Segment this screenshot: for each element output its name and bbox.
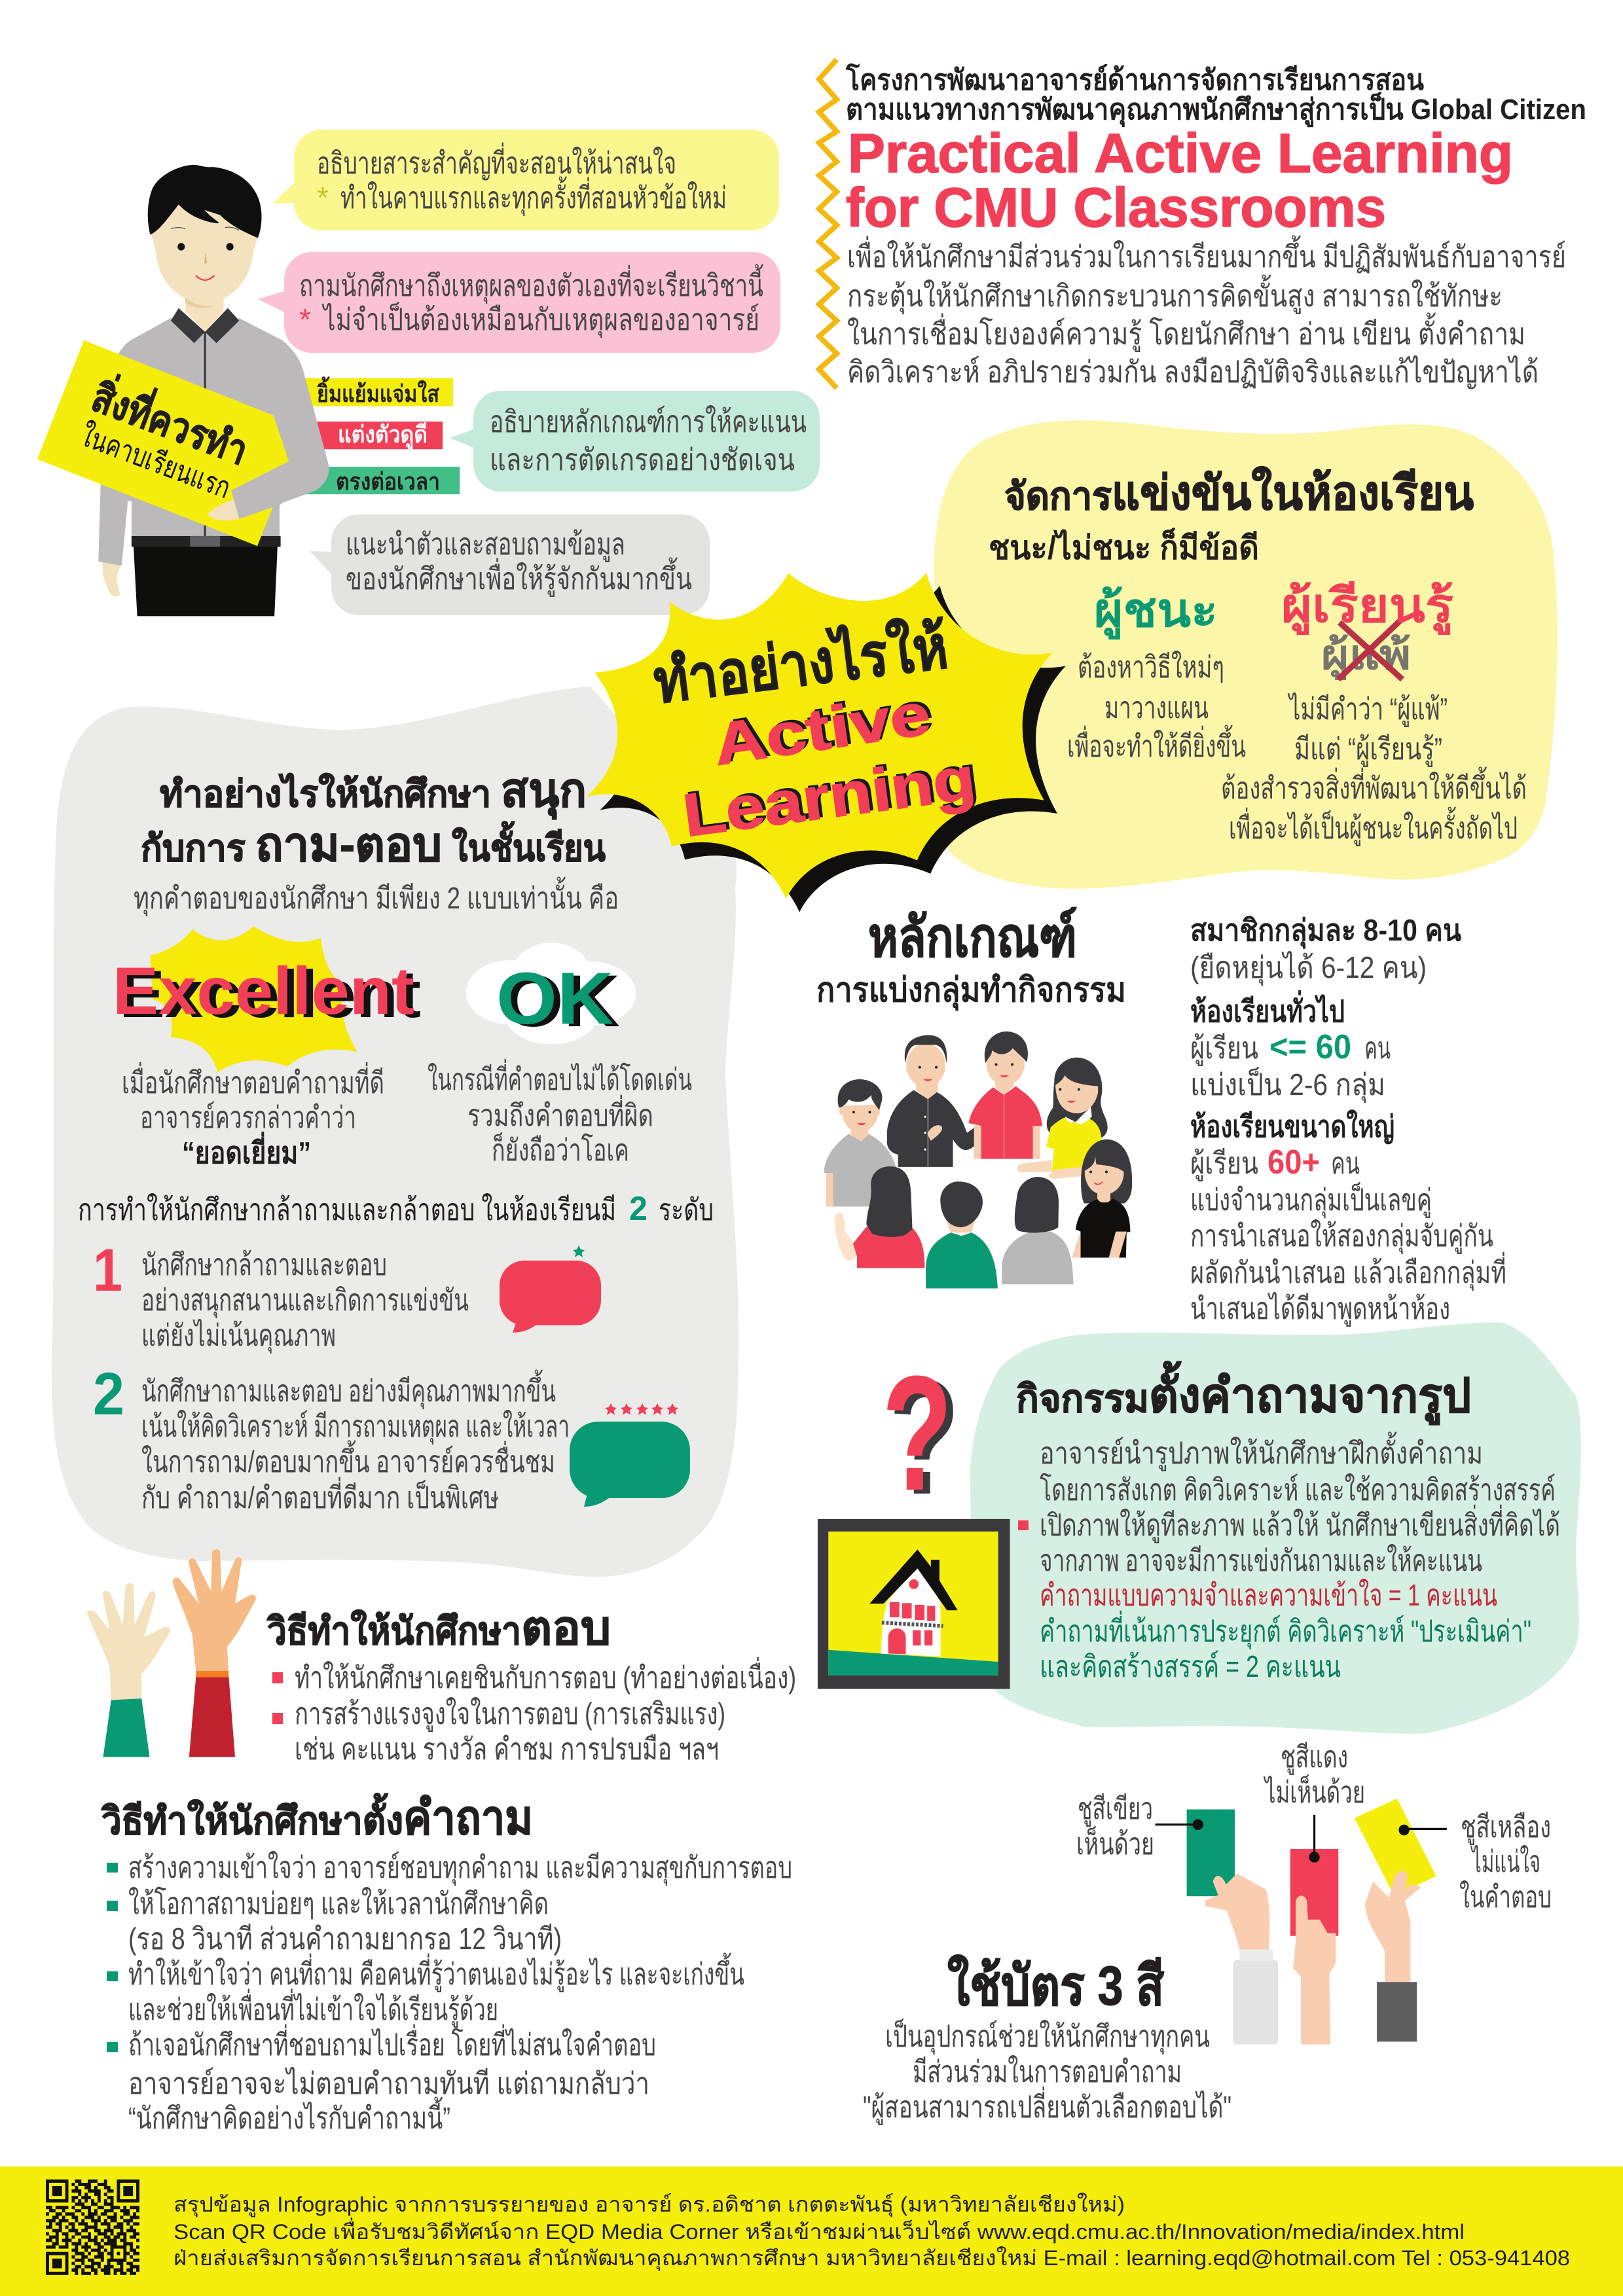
icon: red speech bubble with star xyxy=(500,1246,601,1333)
text: group size rules: <= 60 xyxy=(1269,1028,1351,1066)
levels heading: 2 xyxy=(629,1190,647,1228)
ok text xyxy=(428,1058,692,1167)
list: อาจารย์อาจจะไม่ตอบคำถามทันที แต่ถามกลับว่า xyxy=(128,2066,649,2100)
icon: green speech bubble with five stars xyxy=(570,1403,690,1507)
label: yellow card xyxy=(1459,1810,1552,1914)
callout: green speech bubble: และการตัดเกรดอย่างชัดเจน xyxy=(490,442,795,476)
level two: เน้นให้คิดวิเคราะห์ มีการถามเหตุผล และให้เวลา xyxy=(141,1409,570,1445)
callout: pink speech bubble: * xyxy=(299,302,311,336)
list: และช่วยให้เพื่อนที่ไม่เข้าใจได้เรียนรู้ด้วย xyxy=(128,1988,498,2028)
heading xyxy=(101,1792,533,1844)
ok text: ในกรณีที่คำตอบไม่ได้โดดเด่น xyxy=(428,1058,692,1096)
qr code xyxy=(46,2181,139,2273)
heading xyxy=(266,1602,611,1655)
list: เช่น คะแนน รางวัล คำชม การปรบมือ ฯลฯ xyxy=(295,1732,719,1766)
callout: yellow speech bubble: * xyxy=(317,181,329,215)
text: card explanation: เป็นอุปกรณ์ช่วยให้นักศึกษาทุกคน xyxy=(885,2018,1210,2055)
heading line two: ถาม-ตอบ xyxy=(255,819,442,871)
excellent text: เมื่อนักศึกษาตอบคำถามที่ดี xyxy=(122,1062,384,1100)
heading line two xyxy=(141,819,606,871)
loser crossed out: ผู้แพ้ xyxy=(1321,633,1411,680)
subheading: ทุกคำตอบของนักศึกษา มีเพียง 2 แบบเท่านั้น คือ xyxy=(134,876,619,917)
section: group criteria heading: หลักเกณฑ์ xyxy=(868,906,1077,968)
level one: นักศึกษากล้าถามและตอบ xyxy=(141,1247,387,1282)
heading line one xyxy=(160,764,587,820)
level two: กับ คำถาม/คำตอบที่ดีมาก เป็นพิเศษ xyxy=(141,1477,499,1515)
level two: 2 xyxy=(93,1361,124,1427)
activity text: และคิดสร้างสรรค์ = 2 คะแนน xyxy=(1040,1649,1341,1683)
loser crossed out xyxy=(1321,620,1411,680)
burst badge: how to do active learning xyxy=(587,573,1066,912)
subheading: ชนะ/ไม่ชนะ ก็มีข้อดี xyxy=(989,528,1259,566)
text: group size rules: นำเสนอได้ดีมาพูดหน้าห้อง xyxy=(1190,1291,1450,1327)
intro paragraph: ในการเชื่อมโยงองค์ความรู้ โดยนักศึกษา อ่าน เขียน ตั้งคำถาม xyxy=(847,312,1525,352)
panel: question and answer xyxy=(52,687,739,1577)
text: group size rules xyxy=(1190,913,1506,1327)
text: group size rules: ห้องเรียนขนาดใหญ่ xyxy=(1190,1109,1395,1144)
panel: classroom competition xyxy=(934,420,1558,889)
label: yellow card: ไม่แน่ใจ xyxy=(1470,1844,1541,1878)
text: group size rules: การนำเสนอให้สองกลุ่มจับคู่กัน xyxy=(1190,1219,1493,1255)
label: red card: ชูสีแดง xyxy=(1281,1740,1348,1775)
list: ถ้าเจอนักศึกษาที่ชอบถามไปเรื่อย โดยที่ไม่สนใจคำตอบ xyxy=(128,2024,656,2062)
activity text xyxy=(1040,1431,1560,1683)
winner text: เพื่อจะทำให้ดียิ่งขึ้น xyxy=(1067,725,1246,763)
callout: gray speech bubble: ของนักศึกษาเพื่อให้รู้จักกันมากขึ้น xyxy=(346,557,692,597)
learner text xyxy=(1221,692,1527,846)
bullet xyxy=(1018,1520,1029,1530)
ok text: ก็ยังถือว่าโอเค xyxy=(492,1132,629,1167)
tag: on time: ตรงต่อเวลา xyxy=(336,468,440,495)
ok text: รวมถึงคำตอบที่ผิด xyxy=(467,1094,653,1132)
text: group size rules: 60+ xyxy=(1267,1143,1320,1181)
credits text: ฝ่ายส่งเสริมการจัดการเรียนการสอน สำนักพัฒนาคุณภาพการศึกษา มหาวิทยาลัยเชียงใหม่ E-mail : learning.eqd@hotmail.com Tel : 053-941408 xyxy=(173,2246,1570,2271)
levels heading: ระดับ xyxy=(659,1193,714,1227)
callout: green speech bubble: อธิบายหลักเกณฑ์การให้คะแนน xyxy=(490,404,807,439)
main title: Practical Active Learning xyxy=(848,122,1513,184)
heading line one: ทำอย่างไรให้นักศึกษา xyxy=(160,772,491,814)
text: group size rules: สมาชิกกลุ่มละ 8-10 คน xyxy=(1190,913,1461,949)
winner text: ต้องหาวิธีใหม่ๆ xyxy=(1078,650,1224,684)
level one: แต่ยังไม่เน้นคุณภาพ xyxy=(141,1318,336,1354)
text: card explanation: "ผู้สอนสามารถเปลี่ยนตัวเลือกตอบได้" xyxy=(863,2086,1231,2125)
section: group criteria heading: การแบ่งกลุ่มทำกิจกรรม xyxy=(816,971,1126,1011)
icon: raised hands xyxy=(87,1549,256,1757)
level one: อย่างสนุกสนานและเกิดการแข่งขัน xyxy=(141,1283,469,1319)
header block xyxy=(819,60,1586,389)
callout: gray speech bubble xyxy=(310,514,710,615)
level one: 1 xyxy=(93,1237,122,1304)
callout: gray speech bubble: แนะนำตัวและสอบถามข้อมูล xyxy=(346,527,625,562)
learner text: ต้องสำรวจสิ่งที่พัฒนาให้ดีขึ้นได้ xyxy=(1221,766,1527,805)
label: green card: เห็นด้วย xyxy=(1076,1826,1154,1861)
label: green card: ชูสีเขียว xyxy=(1078,1791,1153,1827)
heading xyxy=(1016,1361,1471,1426)
heading: วิธีทำให้นักศึกษาตั้ง xyxy=(101,1793,403,1842)
panel: picture question activity xyxy=(970,1323,1581,1734)
callout: pink speech bubble: ไม่จำเป็นต้องเหมือนกับเหตุผลของอาจารย์ xyxy=(321,302,759,338)
burst word: learning: Learning xyxy=(679,745,979,850)
text: group size rules: (ยืดหยุ่นได้ 6-12 คน) xyxy=(1190,950,1427,986)
learner text: มีแต่ “ผู้เรียนรู้” xyxy=(1294,732,1442,767)
label: yellow card: ชูสีเหลือง xyxy=(1461,1810,1551,1845)
excellent badge: Excellent xyxy=(113,954,414,1028)
heading: คำถาม xyxy=(403,1792,533,1844)
section: group criteria heading xyxy=(816,906,1126,1011)
callout: yellow speech bubble: อธิบายสาระสำคัญที่จะสอนให้น่าสนใจ xyxy=(317,142,676,180)
bullets xyxy=(272,1672,283,1724)
credits text: สรุปข้อมูล Infographic จากการบรรยายของ อาจารย์ ดร.อดิชาต เกตตะพันธุ์ (มหาวิทยาลัยเชียงใหม่) xyxy=(173,2193,1125,2217)
text: group size rules: ผู้เรียน xyxy=(1190,1146,1258,1181)
callout: green speech bubble xyxy=(450,391,820,492)
ok badge: OK xyxy=(503,960,620,1042)
list: ทำให้นักศึกษาเคยชินกับการตอบ (ทำอย่างต่อเนื่อง) xyxy=(295,1657,796,1695)
icon: question mark: ? xyxy=(889,1346,960,1528)
panel: first class tips xyxy=(258,130,820,615)
levels heading: การทำให้นักศึกษากล้าถามและกล้าตอบ ในห้องเรียนมี xyxy=(78,1193,616,1227)
excellent text: “ยอดเยี่ยม” xyxy=(182,1132,311,1170)
heading: ตอบ xyxy=(521,1602,611,1655)
section: how to make students answer xyxy=(266,1602,796,1766)
heading: use three coloured cards: ใช้บัตร 3 สี xyxy=(947,1954,1165,2017)
learner text: ไม่มีคำว่า “ผู้แพ้” xyxy=(1287,692,1448,727)
excellent badge: Excellent xyxy=(119,957,421,1031)
heading: แข่งขันในห้องเรียน xyxy=(1112,465,1474,520)
text: group size rules: คน xyxy=(1331,1146,1360,1180)
label: red card: ไม่เห็นด้วย xyxy=(1263,1774,1365,1809)
learner label: ผู้เรียนรู้ xyxy=(1281,580,1453,636)
intro paragraph: กระตุ้นให้นักศึกษาเกิดกระบวนการคิดขั้นสูง สามารถใช้ทักษะ xyxy=(847,274,1503,315)
text: group size rules: ห้องเรียนทั่วไป xyxy=(1190,990,1345,1028)
label: green card xyxy=(1076,1791,1154,1861)
footer band xyxy=(0,2166,1623,2296)
credits text xyxy=(173,2193,1570,2271)
text: group size rules: แบ่งเป็น 2-6 กลุ่ม xyxy=(1190,1067,1385,1103)
heading: วิธีทำให้นักศึกษา xyxy=(266,1609,521,1653)
main title xyxy=(846,122,1513,238)
level two xyxy=(93,1361,570,1515)
text: group size rules: คน xyxy=(1364,1031,1391,1065)
list: การสร้างแรงจูงใจในการตอบ (การเสริมแรง) xyxy=(295,1696,725,1732)
text: card explanation xyxy=(863,2018,1231,2125)
callout: pink speech bubble: ถามนักศึกษาถึงเหตุผลของตัวเองที่จะเรียนวิชานี้ xyxy=(299,264,763,304)
level two: ในการถาม/ตอบมากขึ้น อาจารย์ควรชื่นชม xyxy=(141,1440,555,1479)
tag: smile: ยิ้มแย้มแจ่มใส xyxy=(317,376,439,407)
ok badge: OK xyxy=(496,958,613,1039)
excellent text xyxy=(122,1062,384,1170)
burst heading: ทำอย่างไรให้ xyxy=(650,613,951,716)
excellent badge xyxy=(113,926,421,1072)
text: group size rules: ผลัดกันนำเสนอ แล้วเลือกกลุ่มที่ xyxy=(1190,1251,1506,1291)
heading: จัดการ xyxy=(1004,475,1112,518)
excellent text: อาจารย์ควรกล่าวคำว่า xyxy=(140,1100,356,1134)
intro paragraph xyxy=(847,235,1566,389)
heading: กิจกรรม xyxy=(1016,1378,1149,1420)
callout: pink speech bubble xyxy=(258,252,780,353)
sign subheading: ในคาบเรียนแรก xyxy=(76,418,236,505)
label: red card xyxy=(1263,1740,1365,1809)
list: (รอ 8 วินาที ส่วนคำถามยากรอ 12 วินาที) xyxy=(128,1922,562,1956)
text: card explanation: มีส่วนร่วมในการตอบคำถาม xyxy=(913,2054,1182,2089)
project title lines: โครงการพัฒนาอาจารย์ด้านการจัดการเรียนการสอน xyxy=(845,62,1424,96)
label: yellow card: ในคำตอบ xyxy=(1459,1880,1552,1914)
callout: yellow speech bubble: ทำในคาบแรกและทุกครั้งที่สอนหัวข้อใหม่ xyxy=(340,176,727,217)
heading line two: กับการ xyxy=(141,827,246,869)
list: ให้โอกาสถามบ่อยๆ และให้เวลานักศึกษาคิด xyxy=(128,1886,549,1920)
main title: for CMU Classrooms xyxy=(846,177,1386,238)
illustration: three colour cards xyxy=(1076,1740,1552,2045)
credits text: Scan QR Code เพื่อรับชมวิดีทัศน์จาก EQD Media Corner หรือเข้าชมผ่านเว็บไซต์ www.eqd.cmu.ac.th/Innovation/media/index.html xyxy=(173,2217,1465,2244)
illustration: teacher holding sign xyxy=(37,165,460,616)
text: group size rules: ผู้เรียน xyxy=(1190,1031,1258,1066)
heading line one: สนุก xyxy=(501,764,587,820)
burst word: learning: Learning xyxy=(682,742,982,847)
bullets xyxy=(107,1863,118,2052)
project title lines xyxy=(845,62,1586,128)
list: สร้างความเข้าใจว่า อาจารย์ชอบทุกคำถาม และมีความสุขกับการตอบ xyxy=(128,1850,792,1886)
level one xyxy=(93,1237,469,1354)
list: ทำให้เข้าใจว่า คนที่ถาม คือคนที่รู้ว่าตนเองไม่รู้อะไร และจะเก่งขึ้น xyxy=(128,1952,744,1992)
callout: yellow speech bubble xyxy=(273,130,779,230)
sign heading: สิ่งที่ควรทำ xyxy=(86,368,256,474)
winner text xyxy=(1067,650,1246,763)
winner label: ผู้ชนะ xyxy=(1094,584,1218,640)
burst word: active: Active xyxy=(709,681,934,778)
tag: dress well: แต่งตัวดูดี xyxy=(338,421,428,450)
list xyxy=(128,1850,792,2135)
winner text: มาวางแผน xyxy=(1104,691,1209,725)
illustration: group of students xyxy=(824,1031,1132,1289)
list: “นักศึกษาคิดอย่างไรกับคำถามนี้” xyxy=(128,2096,450,2135)
section: how to make students ask xyxy=(101,1792,792,2135)
heading line two: ในชั้นเรียน xyxy=(452,821,606,869)
heading: ตั้งคำถามจากรูป xyxy=(1149,1361,1471,1426)
list xyxy=(295,1657,796,1766)
icon: framed picture of a house xyxy=(818,1519,1010,1689)
icon: question mark: ? xyxy=(882,1342,953,1524)
learner text: เพื่อจะได้เป็นผู้ชนะในครั้งถัดไป xyxy=(1229,806,1518,846)
text: group size rules: แบ่งจำนวนกลุ่มเป็นเลขคู่ xyxy=(1190,1182,1432,1219)
level two: นักศึกษาถามและตอบ อย่างมีคุณภาพมากขึ้น xyxy=(141,1369,556,1410)
ok badge xyxy=(466,942,636,1045)
activity text: อาจารย์นำรูปภาพให้นักศึกษาฝึกตั้งคำถาม xyxy=(1040,1431,1483,1471)
burst word: active: Active xyxy=(712,679,938,776)
